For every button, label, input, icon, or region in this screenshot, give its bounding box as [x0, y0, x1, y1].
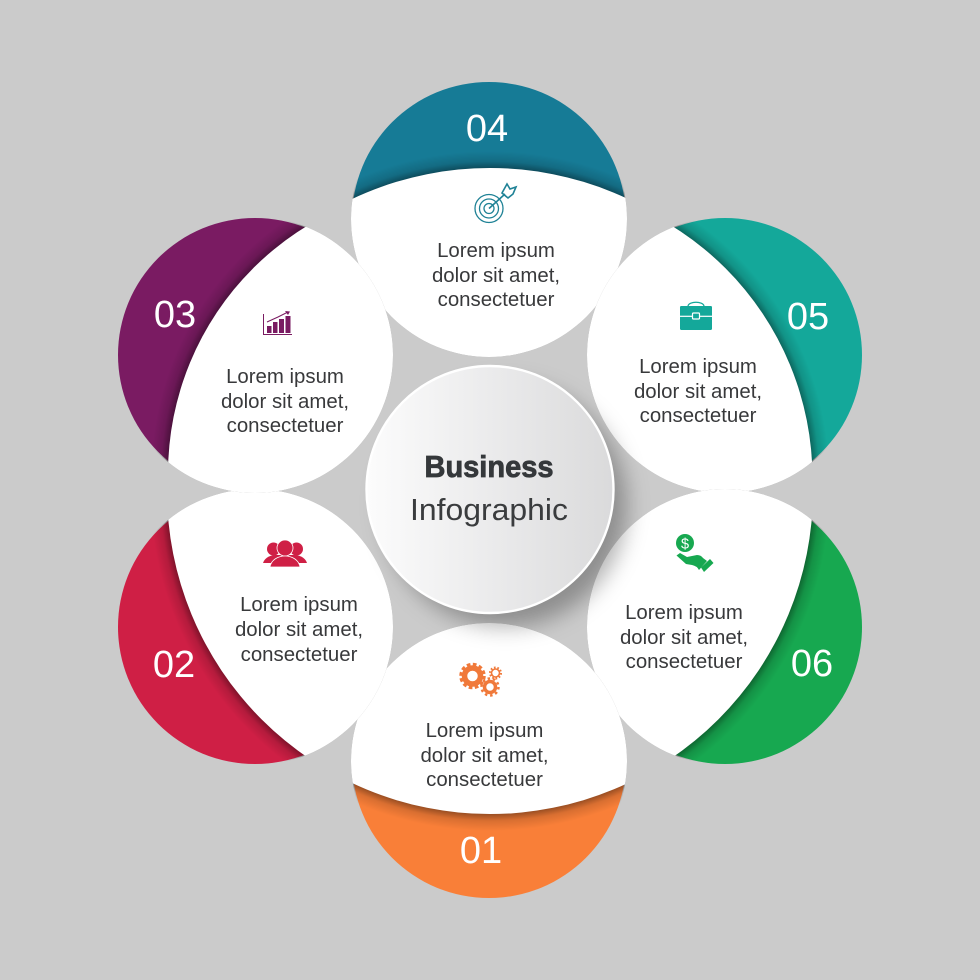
text: step 06: dolor sit amet,: [620, 627, 748, 649]
icon: briefcase: [680, 302, 712, 330]
text: step 04: consectetuer: [438, 289, 555, 311]
panel: central hub: [366, 366, 627, 627]
number 04: 04: [466, 108, 508, 150]
text: step 05: Lorem ipsum: [639, 356, 757, 378]
text: step 05: dolor sit amet,: [634, 381, 762, 403]
text: step 02: Lorem ipsum: [240, 594, 358, 616]
text: step 06: consectetuer: [626, 651, 743, 673]
text: step 01: consectetuer: [426, 769, 543, 791]
number 01: 01: [460, 830, 502, 872]
hub title: [410, 449, 568, 527]
text: step 04: Lorem ipsum: [437, 240, 555, 262]
panel: step 01: [351, 623, 627, 898]
icon: group of people: [263, 540, 307, 567]
panel: step 05: [587, 218, 862, 491]
panel: step 04: [351, 82, 627, 357]
text: step 06: Lorem ipsum: [625, 602, 743, 624]
icon: hand holding dollar coin: $: [681, 536, 689, 552]
number 06: 06: [791, 643, 833, 685]
panel: step 06: [587, 489, 862, 764]
text: step 03: Lorem ipsum: [226, 366, 344, 388]
text: step 01: Lorem ipsum: [426, 720, 543, 742]
icon: target with arrow: [475, 184, 516, 222]
number 03: 03: [154, 294, 196, 336]
text: step 03: dolor sit amet,: [221, 391, 349, 413]
text: step 02: dolor sit amet,: [235, 619, 363, 641]
number 02: 02: [153, 644, 195, 686]
text: step 04: dolor sit amet,: [432, 265, 560, 287]
icon: gears: [461, 664, 501, 696]
text: step 05: consectetuer: [640, 405, 757, 427]
panel: step 03: [118, 218, 393, 493]
icon: growth bar chart: [264, 311, 292, 334]
icon: hand holding dollar coin: [676, 534, 714, 572]
number 05: 05: [787, 296, 829, 338]
hub title: Infographic: [410, 492, 568, 527]
panel: step 02: [118, 491, 393, 764]
text: step 01: dolor sit amet,: [420, 745, 549, 767]
hub title: Business: [424, 449, 554, 484]
text: step 03: consectetuer: [227, 415, 344, 437]
text: step 02: consectetuer: [241, 644, 358, 666]
